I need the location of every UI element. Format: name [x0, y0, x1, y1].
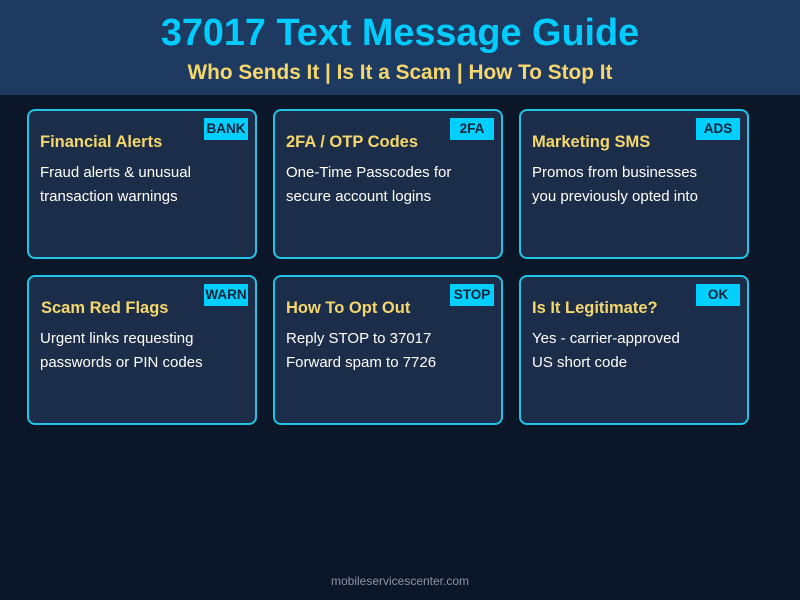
text — [532, 164, 698, 205]
badge: WARN — [205, 287, 247, 302]
badge — [696, 284, 740, 306]
badge: BANK — [206, 121, 246, 136]
badge: ADS — [704, 121, 732, 136]
heading: Marketing SMS — [532, 133, 650, 151]
text — [40, 164, 191, 205]
text: secure account logins — [286, 188, 431, 205]
text: Yes - carrier-approved — [532, 330, 680, 347]
subtitle: Who Sends It | Is It a Scam | How To Stop It — [188, 61, 612, 84]
heading: Is It Legitimate? — [532, 299, 658, 317]
card: marketing — [519, 109, 749, 259]
card: legitimate — [519, 275, 749, 425]
card: opt out — [273, 275, 503, 425]
card: scam red flags — [27, 275, 257, 425]
text: US short code — [532, 354, 627, 371]
heading: 2FA / OTP Codes — [286, 133, 418, 151]
text: Fraud alerts & unusual — [40, 164, 191, 181]
badge: 2FA — [460, 121, 484, 136]
text: Reply STOP to 37017 — [286, 330, 431, 347]
text: Forward spam to 7726 — [286, 354, 436, 371]
badge — [696, 118, 740, 140]
text — [286, 164, 452, 205]
badge: STOP — [454, 287, 490, 302]
text: Promos from businesses — [532, 164, 697, 181]
badge — [450, 118, 494, 140]
text — [286, 330, 436, 371]
text: One-Time Passcodes for — [286, 164, 451, 181]
badge — [204, 284, 248, 306]
card: 2FA — [273, 109, 503, 259]
badge — [204, 118, 248, 140]
badge — [450, 284, 494, 306]
text: passwords or PIN codes — [40, 354, 203, 371]
text — [532, 330, 680, 371]
text: Urgent links requesting — [40, 330, 193, 347]
text — [40, 330, 203, 371]
header band — [0, 0, 800, 95]
heading: How To Opt Out — [286, 299, 410, 317]
badge: OK — [708, 287, 728, 302]
heading: Financial Alerts — [40, 133, 162, 151]
text: you previously opted into — [532, 188, 698, 205]
heading: Scam Red Flags — [41, 299, 168, 317]
title: 37017 Text Message Guide — [161, 12, 639, 54]
text: transaction warnings — [40, 188, 178, 205]
footer: mobileservicescenter.com — [331, 574, 469, 588]
card: financial alerts — [27, 109, 257, 259]
